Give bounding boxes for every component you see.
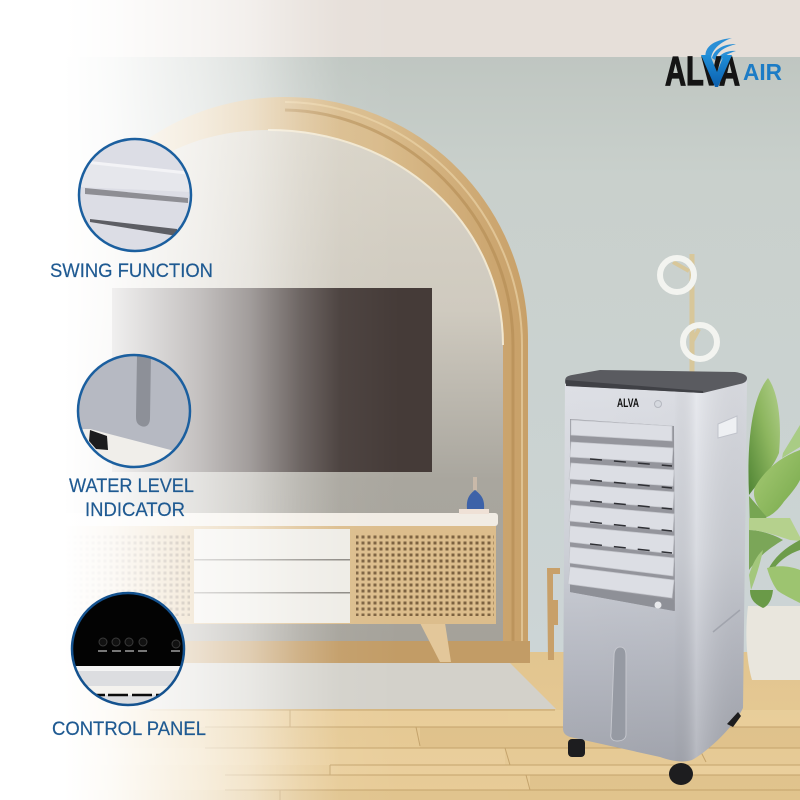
handle xyxy=(718,416,737,438)
wooden arch xyxy=(42,97,528,652)
control panel icon circle xyxy=(72,593,184,705)
water level window xyxy=(611,647,626,741)
louvres xyxy=(568,420,674,598)
TV xyxy=(112,288,432,472)
logo: Alva Air: AIR xyxy=(743,59,782,85)
potted plant xyxy=(746,378,800,680)
floor xyxy=(0,641,800,800)
swing label: SWING FUNCTION xyxy=(50,260,213,282)
wheels xyxy=(568,712,741,785)
vase xyxy=(746,606,800,680)
water level label: INDICATOR xyxy=(85,499,185,521)
water level label: WATER LEVEL xyxy=(69,475,194,497)
cabinet xyxy=(40,477,498,662)
louvre panel xyxy=(568,419,675,611)
swing icon circle xyxy=(79,139,191,251)
air cooler product xyxy=(563,370,747,785)
power button xyxy=(654,400,662,408)
logo swoosh xyxy=(705,38,736,62)
stool xyxy=(547,568,560,660)
feature: water level indicator xyxy=(69,355,194,521)
top cap xyxy=(565,370,747,393)
brand mark: ALVA xyxy=(617,396,639,410)
rug xyxy=(100,663,556,709)
logo: Alva Air: ALVA xyxy=(665,48,740,94)
body xyxy=(563,380,747,761)
water level icon circle xyxy=(78,355,190,467)
floor lamp xyxy=(660,254,717,372)
control panel label: CONTROL PANEL xyxy=(52,718,206,740)
decor vase xyxy=(459,477,489,514)
feature: swing function xyxy=(50,139,213,282)
side groove xyxy=(713,610,740,632)
feature: control panel xyxy=(52,593,206,740)
